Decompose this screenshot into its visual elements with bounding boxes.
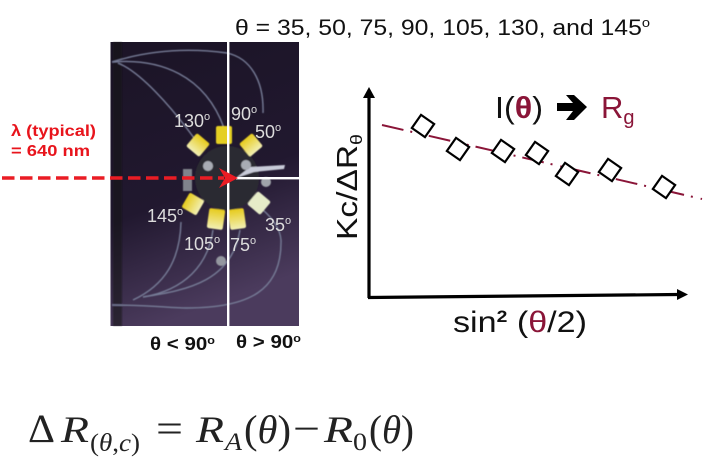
annotation: I(theta) to Rg xyxy=(495,90,635,129)
angle labels: 105 xyxy=(184,234,214,254)
wavelength label: = 640 nm xyxy=(11,143,90,160)
panel: detector photo xyxy=(110,42,299,326)
data points xyxy=(412,115,675,198)
heading: angle list: θ = 35, 50, 75, 90, 105, 130, and 145 xyxy=(235,15,596,40)
sample holder disc xyxy=(195,146,259,210)
angle range captions: o xyxy=(207,335,215,347)
angle range captions: o xyxy=(293,333,301,345)
annotation: I(theta) to Rg: I(θ) xyxy=(495,90,543,125)
angle labels: o xyxy=(251,104,257,116)
chart: Zimm plot xyxy=(332,87,702,339)
y axis label: θ xyxy=(347,134,366,145)
equation: R xyxy=(195,410,224,451)
equation: = xyxy=(156,406,183,451)
angle labels: 145 xyxy=(147,206,177,226)
x axis arrow xyxy=(368,289,688,300)
equation: (θ) xyxy=(244,407,291,452)
wavelength label xyxy=(11,123,96,160)
angle labels: o xyxy=(285,215,291,227)
x axis label: 2 xyxy=(497,307,507,326)
equation: R xyxy=(60,410,89,451)
optical fibres xyxy=(112,50,281,308)
angle labels: 75 xyxy=(230,235,250,255)
equation: (θ,c) xyxy=(90,430,140,457)
angle labels: 90 xyxy=(231,104,251,124)
angle labels: o xyxy=(250,235,256,247)
angle labels: 35 xyxy=(265,215,285,235)
white crosshair lines xyxy=(227,40,300,328)
x axis label: sin xyxy=(453,306,491,339)
angle labels: 130 xyxy=(174,111,204,131)
equation: A xyxy=(223,429,243,456)
equation: R xyxy=(323,410,353,451)
equation: (θ) xyxy=(369,407,414,452)
angle range captions xyxy=(150,332,301,354)
heading: angle list: o xyxy=(642,15,650,30)
angle range captions: θ < 90 xyxy=(150,334,200,354)
equation: − xyxy=(293,406,320,451)
angle labels: o xyxy=(177,206,183,218)
angle labels: 50 xyxy=(255,122,275,142)
equation: 0 xyxy=(353,429,367,456)
annotation: I(theta) to Rg: R xyxy=(601,90,623,125)
sample holder bracket xyxy=(236,165,285,178)
yellow detector connectors xyxy=(181,126,271,230)
annotation: I(theta) to Rg: g xyxy=(623,107,635,129)
wavelength label: λ (typical) xyxy=(11,123,96,140)
x axis label: ( xyxy=(507,306,528,339)
fit line xyxy=(382,125,702,199)
angle labels xyxy=(147,104,291,255)
y axis arrow xyxy=(363,87,375,298)
red laser arrow xyxy=(2,168,238,188)
angle range captions: θ > 90 xyxy=(236,332,286,352)
angle labels: o xyxy=(214,234,220,246)
x axis label: θ/2) xyxy=(528,306,582,339)
angle labels: o xyxy=(275,122,281,134)
angle labels: o xyxy=(204,111,210,123)
equation: Δ xyxy=(28,406,55,451)
equation xyxy=(28,406,414,457)
y axis label: Kc/ΔR xyxy=(332,158,364,240)
